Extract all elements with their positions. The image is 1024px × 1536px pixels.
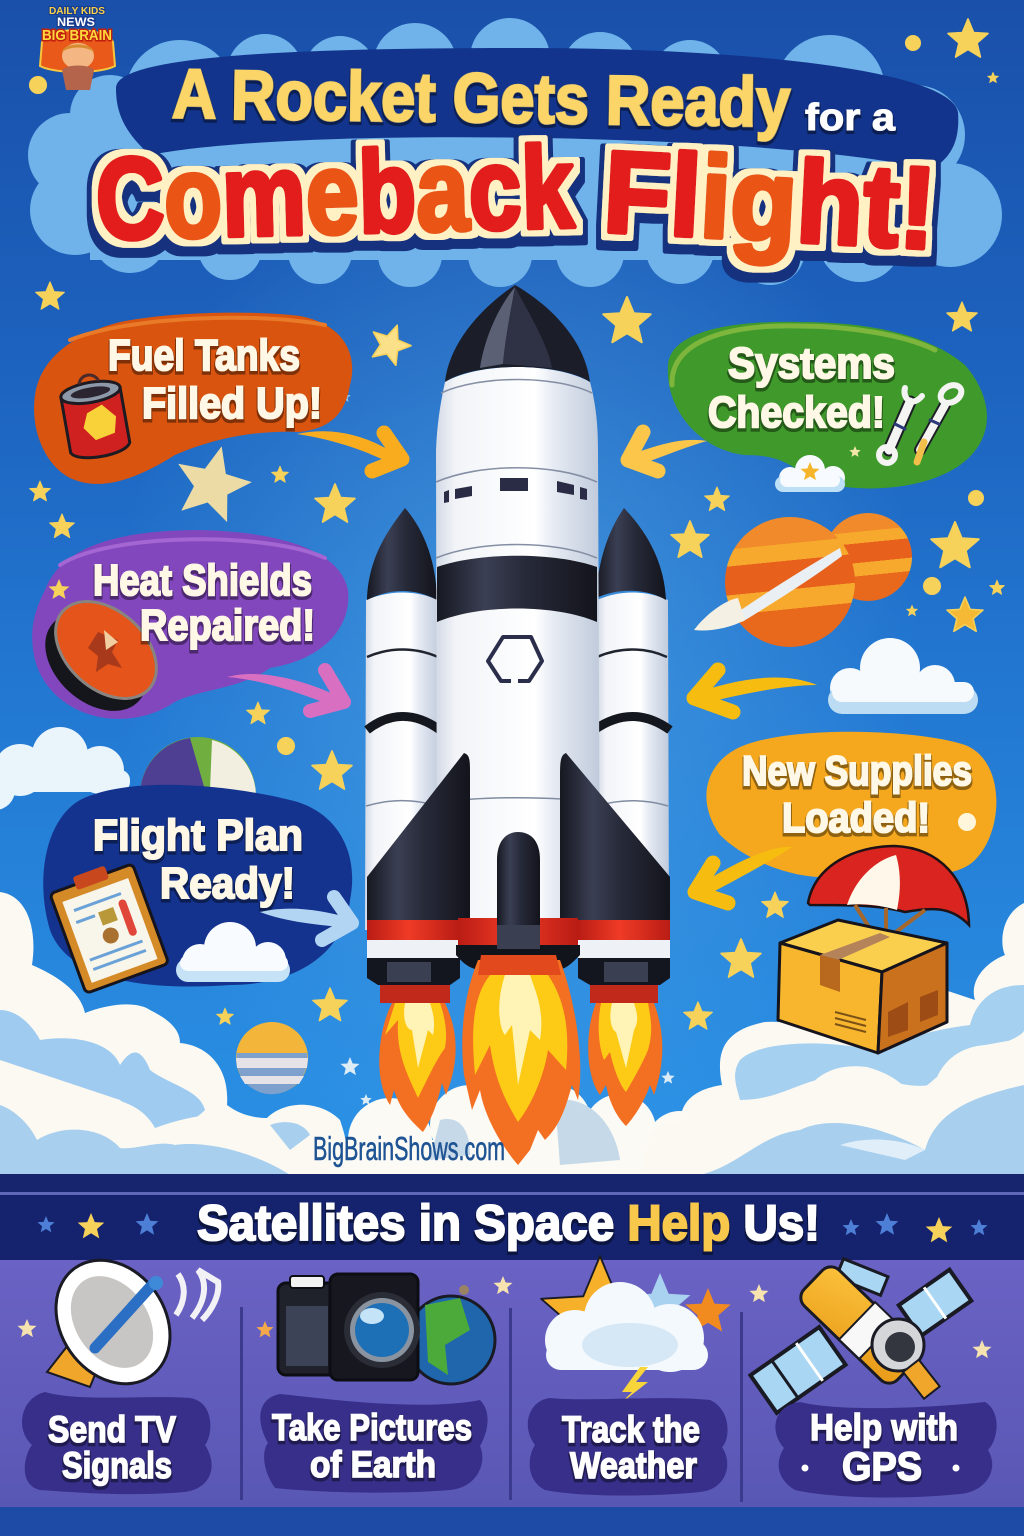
label text: [810, 1407, 958, 1489]
label text: Weather: [570, 1445, 697, 1486]
arrow: [260, 897, 352, 940]
section heading: Satellites in Space Help Us!: [197, 1195, 820, 1251]
icon: small cloud: [176, 922, 290, 982]
bubble highlight: [70, 318, 325, 340]
title line two: Flight!: [601, 126, 939, 274]
right booster: [594, 508, 670, 930]
label text: [48, 1409, 176, 1486]
icon: tools: [879, 382, 965, 463]
card: send TV signals: [22, 1238, 218, 1494]
label: New Supplies: [742, 747, 972, 794]
label text: [272, 1407, 472, 1485]
icon: satellite: [750, 1259, 971, 1413]
title line one: for a: [805, 97, 896, 139]
panel: fuel tanks: [34, 313, 402, 484]
label: [93, 556, 315, 650]
card: track the weather: [528, 1256, 731, 1496]
arrow: [227, 670, 344, 711]
striped planet: [236, 1022, 308, 1094]
label pill: [528, 1398, 728, 1496]
icon: camera: [278, 1274, 420, 1380]
decorative stars and dots: [29, 19, 1005, 1029]
label text: [562, 1409, 700, 1486]
logo: Daily Kids News Big Brain: BIG BRAIN: [42, 27, 112, 44]
title line two: [94, 122, 939, 274]
background sky: [0, 0, 1024, 1210]
engine bands: [367, 918, 670, 958]
small green planet: [140, 737, 256, 853]
arrow: [695, 847, 792, 903]
left fin: [367, 753, 470, 925]
satellites section band: [0, 1174, 1024, 1536]
label: Checked!: [708, 388, 885, 437]
watermark: BigBrainShows.com: [313, 1130, 505, 1167]
label: Fuel Tanks: [108, 331, 300, 380]
label text: Help with: [810, 1407, 958, 1448]
card: help with GPS: [750, 1259, 997, 1497]
label text: of Earth: [310, 1444, 436, 1485]
right cloud: [828, 638, 978, 714]
centre nozzle: [456, 832, 580, 970]
icon: satellite dish: [33, 1238, 218, 1406]
side nozzles: [367, 958, 670, 1003]
label: Filled Up!: [142, 379, 322, 428]
label: Flight Plan: [93, 811, 303, 860]
right flame: [588, 1003, 662, 1126]
label: [742, 747, 972, 841]
small card stars: [18, 1276, 992, 1358]
bubble: [32, 530, 348, 719]
windows: [444, 478, 587, 503]
left flame: [379, 1003, 456, 1132]
bubble: [34, 313, 352, 484]
centre smoke clouds: [330, 1083, 714, 1182]
card: take pictures of earth: [260, 1274, 495, 1493]
title line two: Comeback: [94, 122, 576, 264]
heading stars: [37, 1213, 988, 1242]
label text: Send TV: [48, 1409, 176, 1450]
title cloud: [28, 18, 1002, 287]
label: Heat Shields: [93, 556, 312, 605]
label pill: [260, 1394, 488, 1493]
icon: lightning bolt: [620, 1367, 648, 1404]
title banner: [116, 48, 958, 170]
rocket: [365, 285, 670, 1165]
label: [93, 811, 303, 908]
label text: Signals: [62, 1445, 172, 1486]
icon: sun behind cloud: [541, 1256, 731, 1368]
logo: Daily Kids News Big Brain: [40, 6, 115, 90]
panel: new supplies: [695, 732, 996, 903]
pale small stars: [339, 391, 675, 1105]
bubble: [668, 322, 987, 488]
main body: [436, 367, 600, 930]
hexagon emblem: [488, 637, 542, 681]
label pill: [22, 1392, 212, 1494]
label: [108, 331, 322, 428]
right fin: [560, 753, 670, 925]
left booster: [365, 508, 440, 930]
label: Loaded!: [782, 794, 930, 841]
icon: storm cloud: [545, 1282, 708, 1372]
icon: clipboard: [47, 856, 169, 993]
logo: Daily Kids News Big Brain: DAILY KIDS: [49, 6, 105, 17]
arrow: to rocket from planets: [694, 670, 817, 712]
bottom left clouds: [0, 892, 347, 1175]
column dividers: [240, 1307, 743, 1502]
panel: systems checked: [626, 322, 987, 492]
bubble: [43, 785, 352, 986]
centre flame: [462, 955, 580, 1165]
pale star left: [167, 437, 259, 526]
panel: heat shields: [26, 530, 348, 731]
arrow: [626, 432, 707, 471]
bubble: [706, 732, 996, 877]
label: Repaired!: [140, 601, 315, 650]
label pill: [775, 1402, 997, 1497]
logo: Daily Kids News Big Brain: NEWS: [57, 15, 95, 29]
icon: parachute and box: [778, 846, 969, 1053]
label text: Track the: [562, 1409, 700, 1450]
icon: small cloud: [775, 455, 845, 492]
label text: GPS: [842, 1445, 922, 1489]
icon: fuel can: [58, 370, 131, 462]
label: [708, 339, 895, 437]
panel: flight plan: [43, 785, 352, 993]
icon: shield disk: [26, 582, 175, 731]
title line one: A Rocket Gets Ready: [172, 55, 791, 141]
label: Systems: [728, 339, 895, 388]
left cloud behind flight plan bubble: [0, 727, 130, 810]
bubble highlight: [60, 539, 325, 565]
icon: globe: [407, 1285, 495, 1384]
bubble highlight: [672, 326, 935, 385]
nose cone: [445, 285, 590, 382]
arrow: [297, 431, 402, 471]
label text: Take Pictures: [272, 1407, 472, 1448]
bottom right clouds: [640, 903, 1024, 1175]
label: Ready!: [160, 859, 295, 908]
planets: [694, 513, 912, 647]
